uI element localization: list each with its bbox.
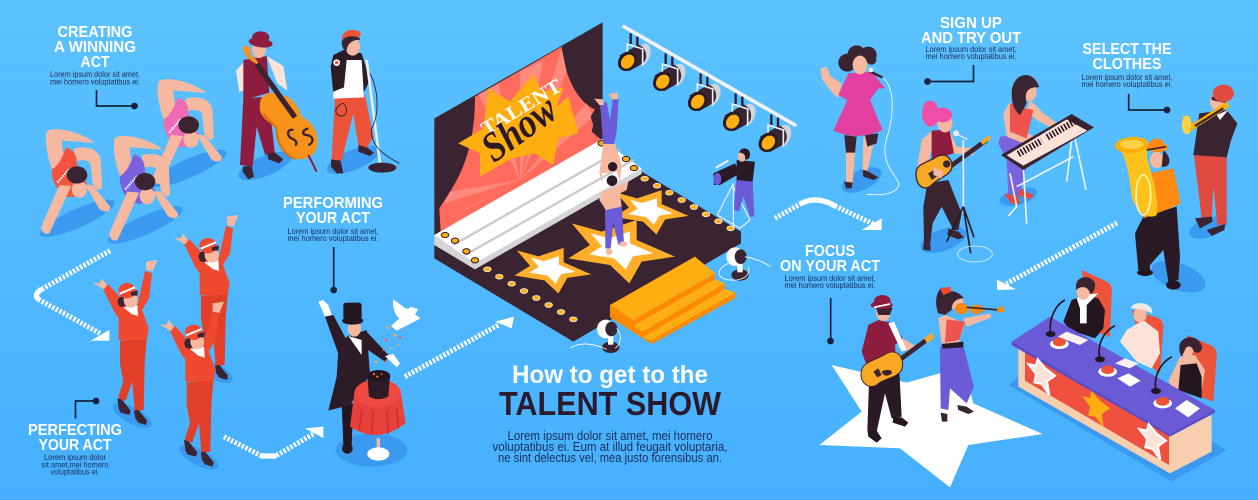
- heading: sign up and try out: AND TRY OUT: [921, 30, 1021, 47]
- camera operator: [713, 148, 755, 228]
- guitar and violin duo: [861, 287, 1004, 443]
- judge 1: [1063, 270, 1112, 338]
- tuba player: [1114, 136, 1210, 299]
- singer with mic stand: [323, 30, 399, 180]
- path arrow 1: [36, 251, 110, 341]
- heading: sign up and try out: SIGN UP: [940, 15, 1002, 32]
- heading: select the clothes: [1082, 41, 1172, 113]
- floor lights: [484, 176, 734, 322]
- path arrow 3: [405, 317, 514, 377]
- heading: performing your act: [283, 195, 383, 293]
- heading: performing your act: PERFORMING: [283, 195, 383, 212]
- main title: How to get to the: [512, 361, 708, 389]
- acrobats: [594, 93, 628, 255]
- pink dress singer: [821, 45, 899, 198]
- front dancers: [93, 260, 224, 475]
- heading: perfecting your act: [28, 398, 122, 476]
- backdrop wall: [434, 22, 603, 235]
- stage with backdrop: [434, 22, 771, 353]
- guitar singer with pink hair: [916, 101, 992, 262]
- heading: perfecting your act: voluptatibus ei.: [50, 466, 100, 476]
- heading: creating a winning act: CREATING: [58, 24, 132, 41]
- heading: select the clothes: CLOTHES: [1092, 56, 1162, 73]
- heading: creating a winning act: A WINNING: [54, 39, 136, 56]
- gymnasts group: [36, 79, 230, 250]
- main title: voluptatibus ei. Eum at illud feugait voluptaria,: [492, 440, 728, 454]
- heading: performing your act: mei homero voluptatibus ei.: [288, 233, 378, 243]
- violinist: [936, 287, 1004, 422]
- white steps: [434, 139, 642, 269]
- heading: perfecting your act: sit amet,mei homero: [42, 460, 109, 470]
- spotlights: [570, 247, 771, 353]
- heading: focus on your act: mei homero voluptatibus ei.: [784, 280, 876, 290]
- judge 2: [1120, 303, 1163, 373]
- white floor star: [819, 365, 1043, 487]
- heading: select the clothes: SELECT THE: [1082, 41, 1172, 58]
- sign starburst: [458, 74, 578, 177]
- bass player: [235, 31, 318, 186]
- floor: [434, 172, 741, 342]
- heading: creating a winning act: [50, 24, 140, 109]
- heading: performing your act: Lorem ipsum dolor sit amet,: [288, 226, 378, 236]
- heading: perfecting your act: Lorem ipsum dolor: [44, 452, 106, 462]
- heading: perfecting your act: YOUR ACT: [38, 437, 112, 454]
- table stars: [1028, 359, 1166, 460]
- sign text: TALENT: [477, 75, 566, 140]
- heading: perfecting your act: PERFECTING: [28, 422, 122, 439]
- heading: focus on your act: FOCUS: [805, 243, 855, 260]
- orange steps: [610, 257, 736, 344]
- back dancer: [174, 215, 238, 388]
- keyboard player: [998, 75, 1094, 224]
- buttons and papers: [1050, 332, 1200, 417]
- heading: sign up and try out: [921, 15, 1021, 85]
- path arrow 4: [775, 200, 882, 230]
- guitarist: [861, 295, 934, 443]
- judges table: [1008, 270, 1227, 482]
- path arrow 2: [224, 427, 323, 456]
- heading: performing your act: YOUR ACT: [296, 210, 370, 227]
- main title: ne sint delectus vel, mea justo forensibus an.: [498, 451, 722, 465]
- table front: [1018, 348, 1170, 473]
- path arrow 5: [997, 223, 1117, 290]
- main title: TALENT SHOW: [499, 385, 722, 422]
- stage with backdrop: Show: [473, 86, 566, 171]
- heading: creating a winning act: Lorem ipsum dolor sit amet,: [50, 69, 140, 79]
- microphones: [1046, 300, 1172, 394]
- stage light rail: [614, 27, 795, 156]
- heading: creating a winning act: mei homero voluptatibus ei.: [50, 76, 140, 86]
- heading: sign up and try out: Lorem ipsum dolor sit amet,: [926, 44, 1016, 54]
- heading: focus on your act: [780, 243, 880, 344]
- heading: select the clothes: Lorem ipsum dolor sit amet,: [1082, 72, 1172, 82]
- main title: Lorem ipsum dolor sit amet, mei homero: [508, 429, 713, 443]
- trumpet player: [1182, 85, 1237, 243]
- heading: focus on your act: ON YOUR ACT: [780, 258, 880, 275]
- magician with table and dove: [318, 299, 421, 467]
- heading: sign up and try out: mei homero voluptatibus ei.: [926, 51, 1016, 61]
- floor stars: [514, 190, 688, 294]
- heading: creating a winning act: ACT: [80, 54, 110, 71]
- judge 3: [1168, 335, 1217, 402]
- heading: select the clothes: mei homero voluptatibus ei.: [1082, 79, 1172, 89]
- main title: [492, 361, 728, 465]
- heading: focus on your act: Lorem ipsum dolor sit amet,: [784, 273, 876, 283]
